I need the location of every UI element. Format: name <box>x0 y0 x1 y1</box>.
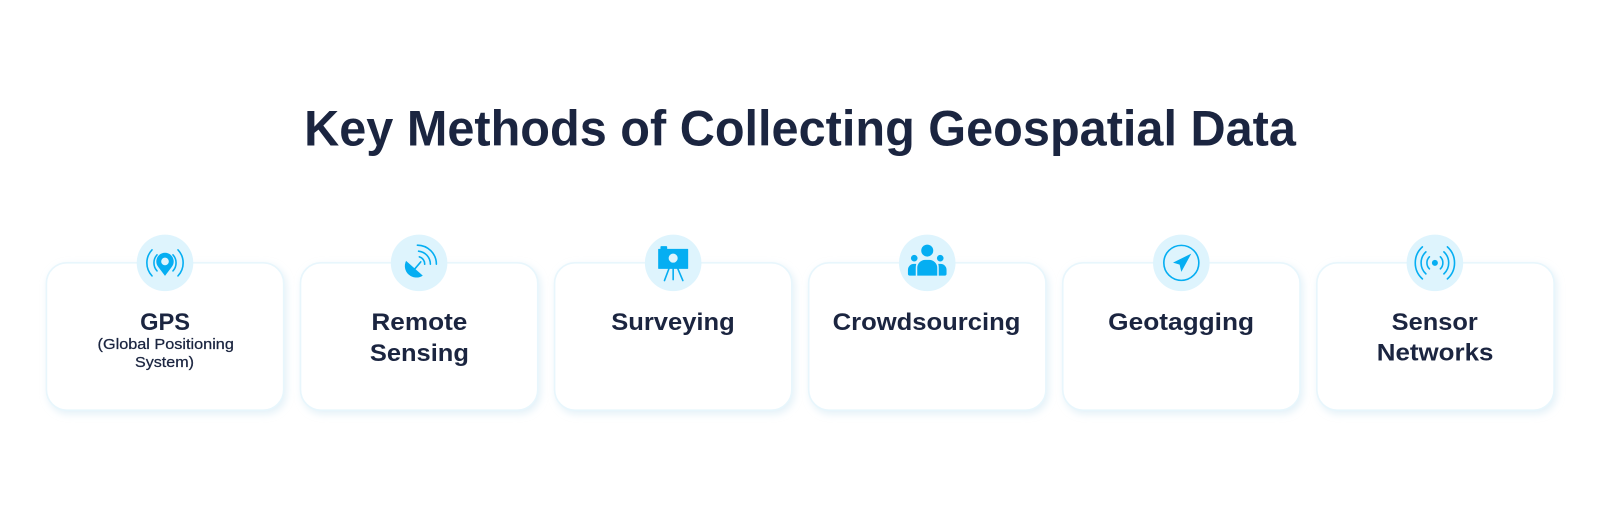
panel: Sensor Networks <box>1317 235 1554 410</box>
icon: group of people <box>899 235 956 291</box>
panel: Remote Sensing <box>301 235 538 410</box>
panel: Geotagging <box>1063 235 1300 410</box>
card: Geotagging <box>1063 263 1300 410</box>
label: Remote Sensing: Remote <box>371 309 467 336</box>
panel: Surveying <box>555 235 792 410</box>
label: Sensor Networks: Sensor <box>1392 309 1478 336</box>
icon: GPS location pin with signal waves <box>137 235 193 291</box>
label: Sensor Networks <box>1377 309 1493 367</box>
label: Geotagging: Geotagging <box>1108 309 1254 336</box>
label: Crowdsourcing: Crowdsourcing <box>833 309 1020 336</box>
icon: satellite dish <box>391 235 447 291</box>
icon: navigation compass <box>1153 235 1210 291</box>
label: Surveying: Surveying <box>611 309 735 336</box>
label: Sensor Networks: Networks <box>1377 340 1493 367</box>
icon: camera on tripod <box>645 235 701 291</box>
sublabel: Global Positioning System: (Global Positioning <box>98 337 234 353</box>
sublabel: Global Positioning System <box>98 337 234 371</box>
card: Crowdsourcing <box>809 263 1046 410</box>
title: Key Methods of Collecting Geospatial Data <box>304 100 1297 156</box>
label: Remote Sensing: Sensing <box>370 340 469 367</box>
label: Remote Sensing <box>370 309 469 367</box>
sublabel: Global Positioning System: System) <box>135 355 194 371</box>
card: GPS <box>46 263 284 410</box>
card: Surveying <box>555 263 792 410</box>
icon: sensor signal waves <box>1407 235 1463 291</box>
panel: Crowdsourcing <box>809 235 1046 410</box>
card: Sensor Networks <box>1317 263 1554 410</box>
panel: GPS <box>46 235 284 410</box>
card: Remote Sensing <box>301 263 538 410</box>
label: GPS: GPS <box>140 309 190 336</box>
